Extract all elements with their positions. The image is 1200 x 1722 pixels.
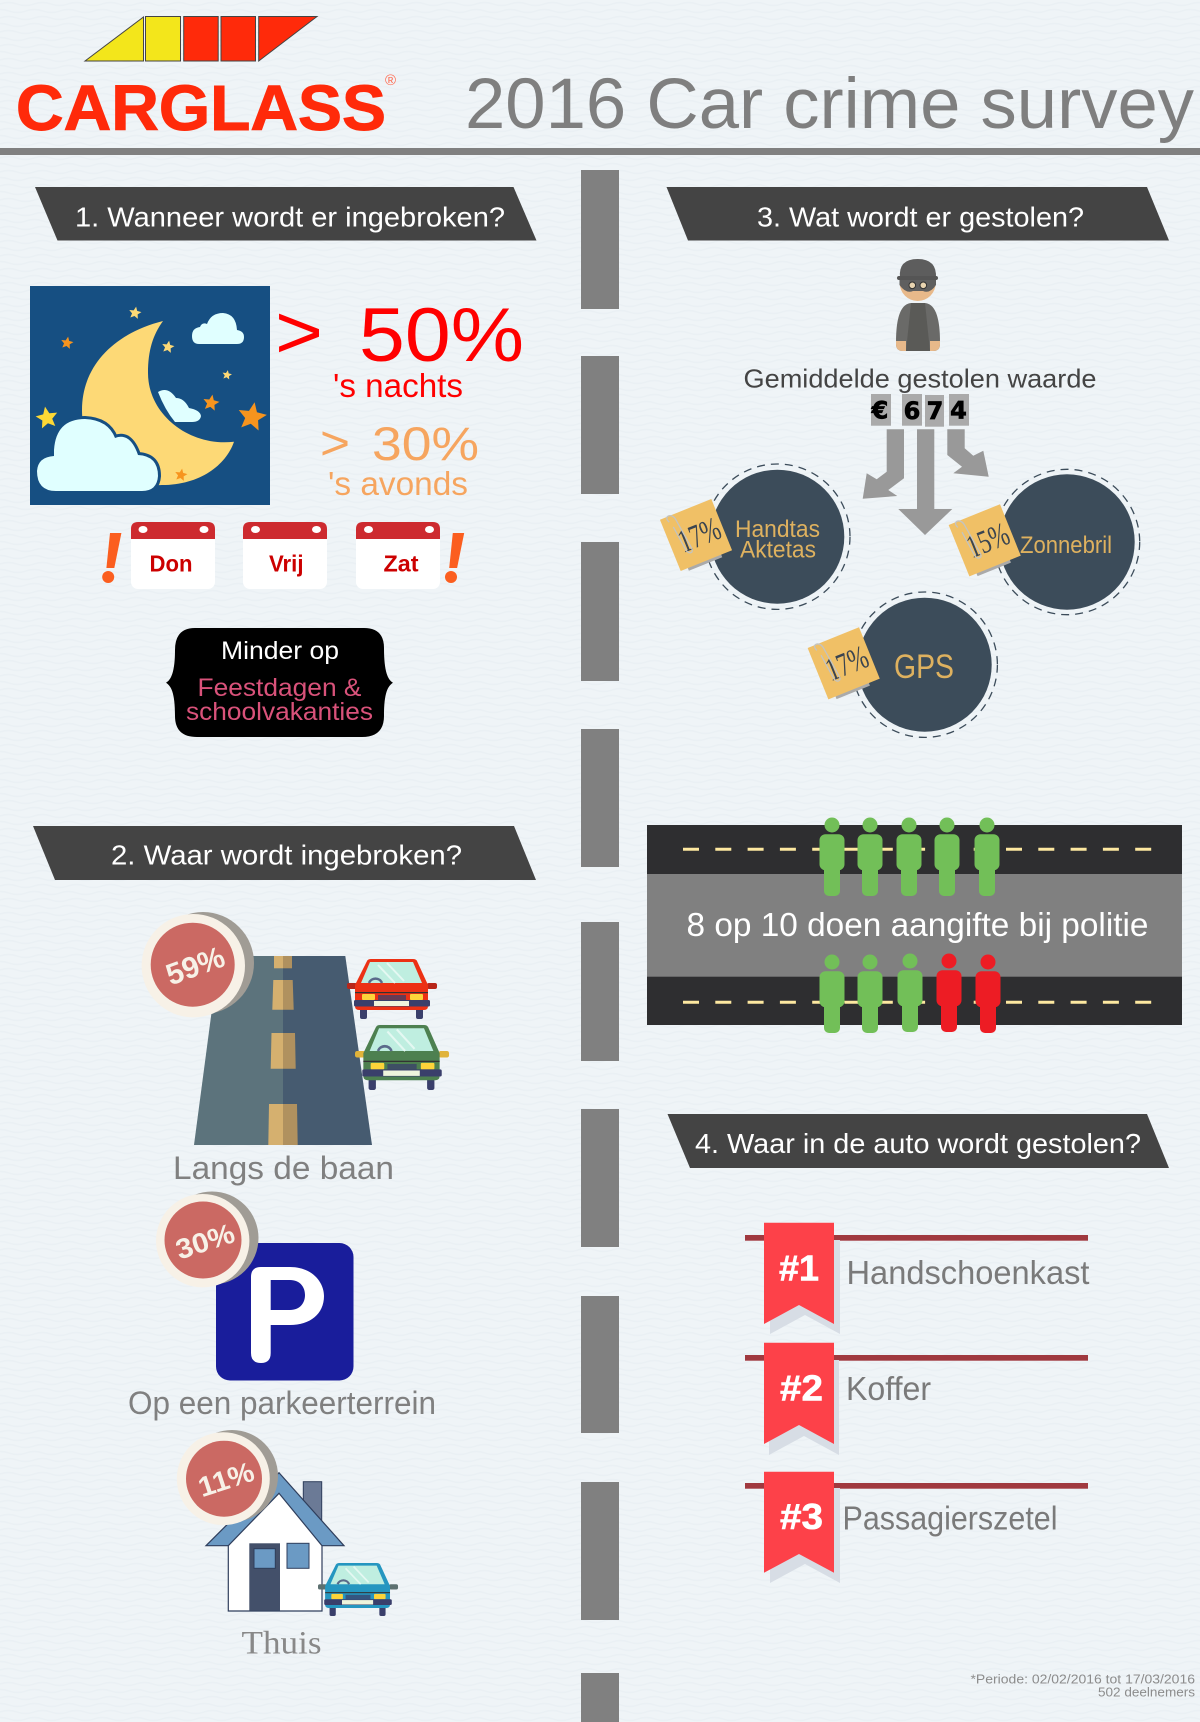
ranking item 1 xyxy=(745,1223,1090,1334)
ranking item 2: Koffer xyxy=(846,1370,931,1407)
footnote: 502 deelnemers xyxy=(1098,1685,1196,1700)
arrow: left xyxy=(863,429,904,499)
ranking item 1: Handschoenkast xyxy=(846,1254,1090,1291)
stat: more than 30% in the evening: > xyxy=(320,416,350,469)
logo: Carglass: ® xyxy=(385,72,396,89)
calendar: Zat: Zat xyxy=(384,550,419,576)
ranking item 3 xyxy=(745,1472,1088,1583)
note: 15%: 15% xyxy=(962,516,1015,566)
badge: 30% xyxy=(156,1192,258,1287)
centre road dashes xyxy=(581,170,619,1722)
callout: less on holidays: Feestdagen & xyxy=(198,674,362,702)
label: Thuis: Thuis xyxy=(242,1626,322,1662)
note: 17%: 17% xyxy=(673,511,726,560)
counter: € 674: € xyxy=(871,396,888,424)
stat: more than 30% in the evening: 's avonds xyxy=(328,465,468,502)
label: Op een parkeerterrein: Op een parkeerterrein xyxy=(128,1385,436,1421)
circle: GPS xyxy=(808,592,997,737)
note: 15% xyxy=(949,504,1022,579)
calendar: Vrij: Vrij xyxy=(269,550,304,576)
callout: less on holidays: Minder op xyxy=(221,637,339,665)
circle: Handtas Aktetas xyxy=(660,464,850,609)
logo: Carglass xyxy=(16,16,396,144)
panel: police report road: 8 op 10 doen aangifte bij politie xyxy=(686,906,1148,943)
icon: parking sign xyxy=(216,1243,354,1380)
heading 4: 4. Waar in de auto wordt gestolen? xyxy=(695,1128,1141,1159)
people: top row xyxy=(820,818,1000,896)
circle: Handtas Aktetas: Handtas xyxy=(735,516,820,543)
heading 4 xyxy=(668,1114,1169,1168)
illustration: house with car xyxy=(206,1473,398,1616)
icon: thief xyxy=(896,259,940,351)
stat: more than 50% at night: 's nachts xyxy=(333,367,463,404)
stat: more than 50% at night: 50% xyxy=(359,293,524,378)
calendars: Don Vrij Zat xyxy=(102,522,464,589)
stat: more than 50% at night: > xyxy=(275,290,323,375)
icon: stars xyxy=(34,306,269,481)
icon: crescent moon xyxy=(82,321,234,485)
footnote xyxy=(970,1671,1196,1700)
icon: exclamation right xyxy=(445,533,464,583)
footnote: *Periode: 02/02/2016 tot 17/03/2016 xyxy=(970,1671,1195,1686)
illustration: road with cars xyxy=(194,956,449,1145)
note: 17% xyxy=(660,499,733,574)
callout: less on holidays xyxy=(166,628,393,737)
calendar: Don: Don xyxy=(150,550,192,576)
circle: Zonnebril: Zonnebril xyxy=(1020,532,1112,559)
title: 2016 Car crime survey xyxy=(465,65,1195,144)
note: 17% GPS xyxy=(808,627,881,702)
ranking item 3: Passagierszetel xyxy=(842,1499,1058,1536)
circle: Zonnebril xyxy=(949,469,1140,615)
callout: less on holidays: schoolvakanties xyxy=(186,698,373,726)
people: bottom row xyxy=(820,954,1000,1033)
icon: green car xyxy=(355,1025,449,1090)
heading 3: 3. Wat wordt er gestolen? xyxy=(757,202,1084,232)
icon: clouds xyxy=(37,313,244,491)
circle: GPS: GPS xyxy=(894,648,954,686)
heading 2 xyxy=(33,826,536,880)
heading 3 xyxy=(666,187,1169,240)
ranking item 2: #2 xyxy=(780,1368,823,1408)
panel: moon night image xyxy=(30,286,270,505)
counter: € 674: 6 xyxy=(904,397,920,425)
heading 1 xyxy=(35,187,536,240)
note: 17% GPS: 17% xyxy=(821,639,874,689)
icon: exclamation left xyxy=(102,533,121,583)
stat: more than 30% in the evening xyxy=(320,416,479,502)
ranking item 2 xyxy=(745,1343,1088,1455)
icon: red car xyxy=(347,959,437,1019)
badge: 59%: 59% xyxy=(162,941,229,992)
calendar: Zat xyxy=(356,522,440,589)
header rule xyxy=(0,148,1200,155)
badge: 30%: 30% xyxy=(172,1217,239,1265)
badge: 59% xyxy=(142,912,254,1017)
counter: € 674: 7 xyxy=(927,397,943,425)
logo: Carglass: CARGLASS xyxy=(16,72,386,144)
ranking item 3: #3 xyxy=(780,1496,823,1537)
icon: blue car xyxy=(318,1563,398,1616)
circle: Handtas Aktetas: Aktetas xyxy=(740,536,816,564)
ranking item 1: #1 xyxy=(779,1248,819,1288)
label: Langs de baan: Langs de baan xyxy=(173,1150,394,1186)
calendar: Vrij xyxy=(243,522,327,589)
heading 2: 2. Waar wordt ingebroken? xyxy=(111,840,462,870)
heading 1: 1. Wanneer wordt er ingebroken? xyxy=(75,202,505,232)
text: average stolen value: Gemiddelde gestolen waarde xyxy=(744,364,1096,394)
badge: 11%: 11% xyxy=(194,1456,258,1503)
counter: € 674: 4 xyxy=(950,396,967,424)
arrow: centre xyxy=(898,429,952,535)
stat: more than 50% at night xyxy=(275,290,524,404)
panel: police report road xyxy=(647,818,1182,1033)
badge: 11% xyxy=(177,1430,278,1525)
arrow: right xyxy=(947,429,989,477)
counter: € 674 xyxy=(871,394,969,427)
calendar: Don xyxy=(131,522,215,589)
stat: more than 30% in the evening: 30% xyxy=(372,417,479,470)
